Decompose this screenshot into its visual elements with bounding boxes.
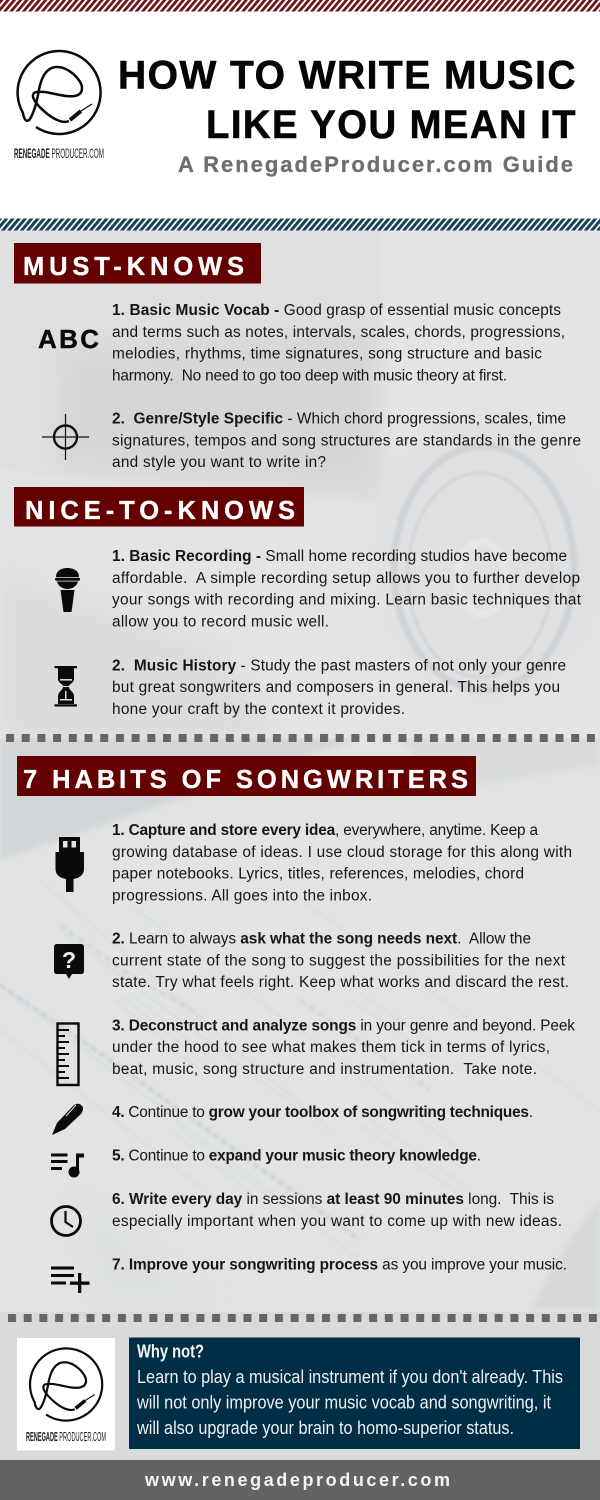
icon: microphone	[55, 568, 80, 612]
icon: usb plug	[56, 837, 84, 892]
panel: why not callout	[129, 1338, 580, 1449]
text: basic recording	[112, 548, 582, 630]
heading: must-knows	[14, 243, 261, 284]
icon: hourglass	[54, 666, 77, 706]
logo wordmark: RENEGADE PRODUCER.COM	[14, 145, 104, 161]
text: habit 5: 5. Continue to expand your music theory knowledge.	[112, 1148, 481, 1164]
text: music history: 2. Music History - Study the past masters of not only your genre	[112, 658, 566, 674]
footer band: www.renegadeproducer.com	[144, 1470, 450, 1490]
heading: nice-to-knows: NICE-TO-KNOWS	[25, 497, 295, 525]
teal striped band	[0, 218, 600, 230]
logo: Renegade Producer	[14, 51, 104, 161]
icon: playlist add	[51, 1266, 90, 1293]
icon: ruler	[58, 1024, 78, 1085]
panel: why not callout: will also upgrade your brain to homo-superior status.	[136, 1418, 514, 1438]
text: habit 3: beat, music, song structure and instrumentation. Take note.	[112, 1061, 537, 1078]
text: basic music vocab	[112, 302, 565, 384]
text: habit 1: paper notebooks. Lyrics, titles, references, melodies, chord	[112, 866, 524, 882]
icon: crosshair	[42, 414, 89, 460]
panel: why not callout: Learn to play a musical instrument if you don't already. This	[137, 1367, 563, 1387]
heading: 7 habits of songwriters: 7 HABITS OF SONGWRITERS	[23, 766, 468, 794]
text: genre/style specific	[112, 410, 581, 471]
divider	[6, 734, 596, 742]
divider	[8, 1314, 598, 1322]
text: habit 4: 4. Continue to grow your toolbox of songwriting techniques.	[112, 1104, 533, 1121]
text: basic music vocab: 1. Basic Music Vocab - Good grasp of essential music concepts	[112, 302, 561, 319]
text: basic recording: your songs with recording and mixing. Learn basic techniques that	[112, 592, 582, 608]
icon: ABC: ABC	[38, 324, 99, 354]
icon: clock	[52, 1206, 80, 1236]
text: music history	[112, 658, 566, 718]
background photo: studio speaker	[0, 230, 600, 740]
text: habit 2: 2. Learn to always ask what the song needs next. Allow the	[112, 930, 531, 948]
text: genre/style specific: 2. Genre/Style Specific - Which chord progressions, scales, time	[112, 410, 566, 428]
icon: music queue	[51, 1154, 84, 1178]
text: basic music vocab: harmony. No need to go too deep with music theory at first.	[112, 368, 507, 384]
text: music history: hone your craft by the context it provides.	[112, 701, 405, 718]
text: habit 2	[112, 930, 569, 991]
text: habit 3	[112, 1018, 575, 1078]
title	[118, 54, 577, 147]
panel: logo card: RENEGADE PRODUCER.COM	[26, 1430, 106, 1444]
text: habit 2: current state of the song to suggest the possibilities for the next	[112, 952, 566, 970]
text: habit 1	[112, 822, 572, 904]
icon: question bubble: ?	[62, 947, 76, 973]
heading: nice-to-knows	[14, 487, 304, 526]
top striped band	[0, 0, 600, 12]
panel: logo card	[17, 1338, 115, 1450]
icon: question bubble	[54, 944, 84, 979]
text: music history: but great songwriters and composers in general. This helps you	[112, 679, 560, 696]
text: basic recording: allow you to record music well.	[112, 614, 329, 630]
text: genre/style specific: and style you want to write in?	[112, 454, 326, 471]
text: habit 2: state. Try what feels right. Keep what works and discard the rest.	[112, 974, 569, 991]
text: habit 1: growing database of ideas. I use cloud storage for this along with	[112, 844, 572, 861]
text: habit 6	[112, 1191, 562, 1230]
text: habit 6: 6. Write every day in sessions at least 90 minutes long. This is	[112, 1191, 554, 1208]
subtitle: A RenegadeProducer.com Guide	[178, 152, 573, 177]
title: HOW TO WRITE MUSIC	[118, 54, 577, 98]
footer band	[0, 1460, 600, 1500]
text: habit 3: 3. Deconstruct and analyze songs in your genre and beyond. Peek	[112, 1018, 575, 1034]
text: basic recording: affordable. A simple recording setup allows you to further develop	[112, 570, 580, 587]
heading: must-knows: MUST-KNOWS	[23, 253, 244, 281]
text: genre/style specific: signatures, tempos and song structures are standards in the genre	[112, 432, 581, 450]
panel: why not callout: Why not?	[137, 1342, 204, 1362]
text: basic music vocab: and terms such as notes, intervals, scales, chords, progressions,	[112, 324, 565, 341]
title: LIKE YOU MEAN IT	[206, 103, 577, 147]
text: basic recording: 1. Basic Recording - Small home recording studios have become	[112, 548, 567, 565]
icon: pen	[52, 1104, 83, 1135]
panel: why not callout: will not only improve your music vocab and songwriting, it	[136, 1392, 551, 1412]
text: habit 7: 7. Improve your songwriting process as you improve your music.	[112, 1256, 567, 1274]
text: habit 1: progressions. All goes into the inbox.	[112, 888, 372, 904]
text: habit 3: under the hood to see what makes them tick in terms of lyrics,	[112, 1039, 550, 1056]
text: habit 1: 1. Capture and store every idea, everywhere, anytime. Keep a	[112, 822, 538, 839]
background photo: sheet music	[0, 738, 600, 1460]
text: habit 6: especially important when you want to come up with new ideas.	[112, 1213, 562, 1230]
heading: 7 habits of songwriters	[17, 756, 476, 796]
text: basic music vocab: melodies, rhythms, time signatures, song structure and basic	[112, 346, 542, 362]
